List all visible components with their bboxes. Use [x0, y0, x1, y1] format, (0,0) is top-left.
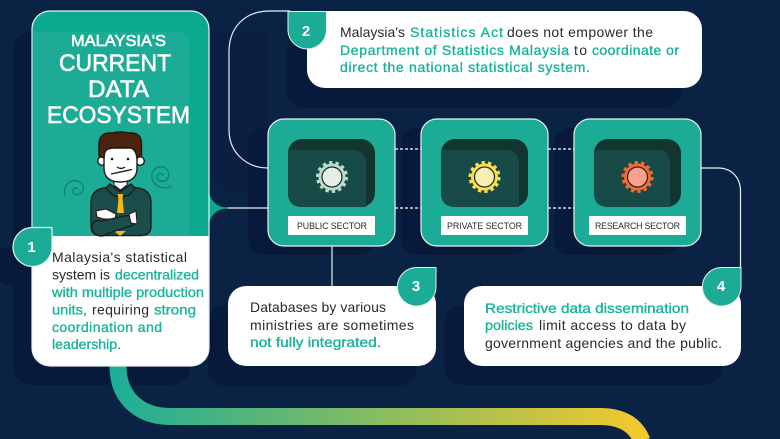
badge 2: 2: [302, 23, 310, 40]
panel: private sector: [421, 119, 548, 246]
text: statement 2: to: [574, 42, 587, 58]
title text: MALAYSIA'S: [71, 33, 166, 50]
icon: private gear: [471, 164, 498, 190]
panel: dissemination callout: [464, 268, 741, 366]
panel: main title card: [13, 11, 228, 366]
icon: research gear: [624, 164, 651, 190]
badge 3: 3: [412, 278, 420, 295]
text: statement 1: decentralized: [115, 266, 199, 282]
label: PRIVATE SECTOR: [447, 221, 522, 231]
text: statement 1: requiring: [92, 302, 149, 318]
badge 2: [288, 12, 326, 49]
panel: research sector: [574, 119, 701, 246]
panel: databases callout: [228, 268, 436, 366]
shadows of panels: [0, 30, 722, 386]
icon: public gear: [318, 164, 346, 190]
badge 4: 4: [717, 278, 726, 295]
text: statement 3: Databases by various: [250, 299, 386, 315]
text: statement 2: does not empower the: [507, 24, 653, 40]
text: statement 1: coordination and: [52, 319, 162, 335]
text: statement 4: [485, 300, 722, 351]
text: statement 2: [340, 24, 679, 75]
label: RESEARCH SECTOR: [595, 221, 680, 231]
badge 1: [13, 227, 52, 266]
badge 3: [397, 268, 436, 306]
text: statement 2: coordinate or: [592, 42, 679, 58]
label: PUBLIC SECTOR: [297, 221, 367, 231]
text: statement 4: policies: [485, 317, 533, 333]
text: statement 3: not fully integrated.: [250, 334, 381, 350]
text: statement 3: ministries are sometimes: [250, 317, 414, 333]
badge 4: [702, 268, 741, 306]
text: statement 2: Malaysia's: [340, 24, 405, 40]
connector lines: [225, 11, 740, 287]
text: statement 4: limit access to data by: [539, 317, 686, 333]
text: statement 1: with multiple production: [51, 284, 204, 300]
text: statement 1: units,: [52, 302, 87, 318]
text: statement 2: direct the national statistical system.: [340, 59, 590, 75]
icon: left swirl: [64, 181, 83, 196]
text: statement 1: leadership.: [52, 336, 121, 352]
text: statement 1: Malaysia's statistical: [52, 249, 187, 265]
ribbon path: [118, 366, 642, 439]
panel: public sector: [268, 119, 395, 246]
title text: ECOSYSTEM: [47, 102, 190, 129]
text: statement 4: government agencies and the public.: [485, 335, 722, 351]
text: statement 2: Department of Statistics Malaysia: [340, 42, 569, 58]
title text: [47, 33, 190, 129]
panel: statistics act callout: [288, 11, 702, 88]
icon: confused man: [91, 132, 151, 236]
title text: CURRENT: [59, 50, 171, 77]
text: statement 2: Statistics Act: [410, 24, 503, 40]
text: statement 1: system is: [52, 266, 110, 282]
text: statement 3: [250, 299, 414, 350]
text: statement 1: strong: [154, 302, 196, 318]
badge 1: 1: [27, 239, 36, 256]
text: statement 1: [51, 249, 204, 352]
icon: right swirl: [152, 167, 172, 188]
text: statement 4: Restrictive data dissemination: [485, 300, 689, 316]
title text: DATA: [88, 76, 149, 103]
